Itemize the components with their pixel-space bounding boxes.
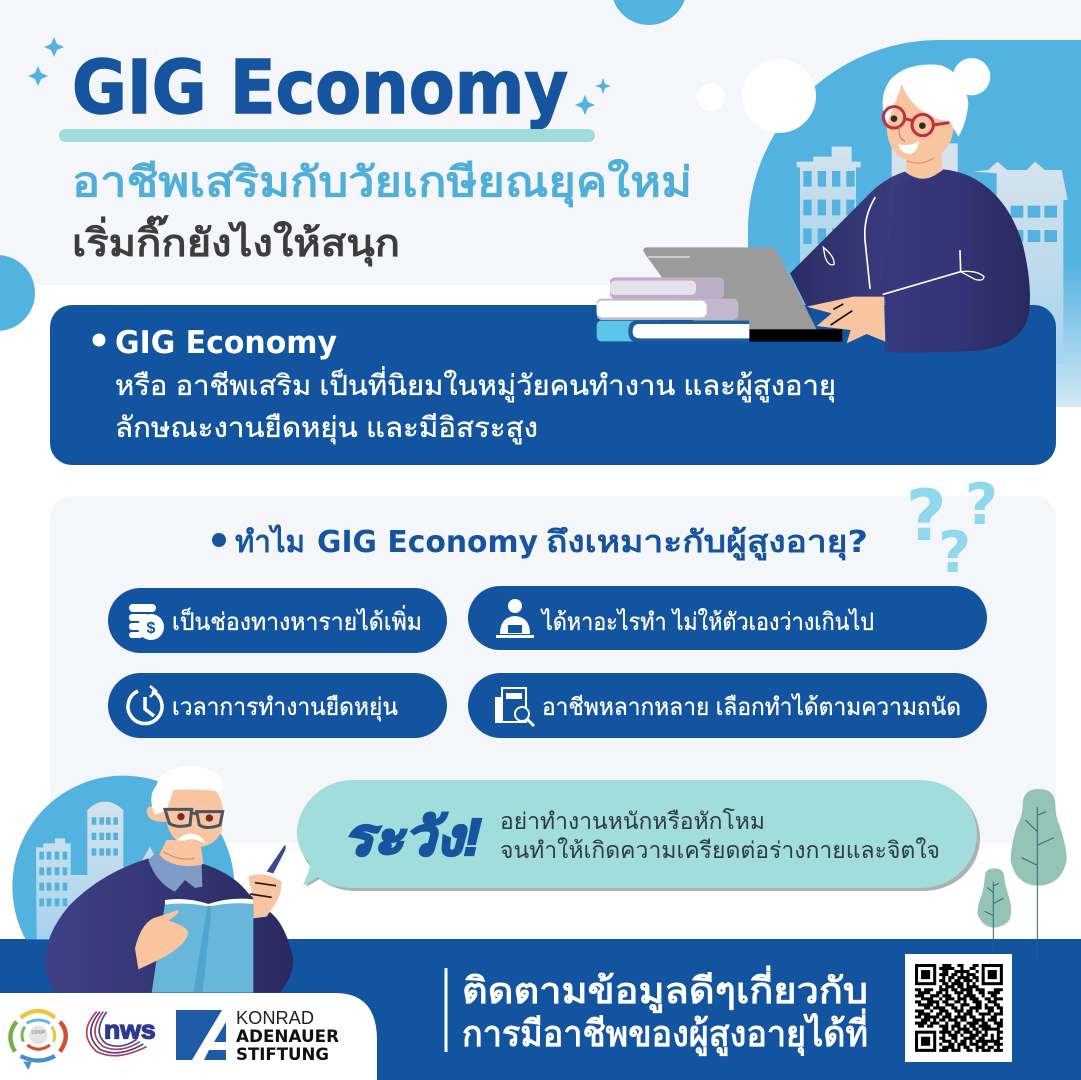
icon: trees — [977, 789, 1067, 960]
callout: warning speech bubble — [297, 780, 980, 891]
icon: question marks — [906, 472, 998, 586]
laptop — [643, 247, 842, 342]
sparkles — [28, 37, 611, 115]
panel body line 1: หรือ อาชีพเสริม เป็นที่นิยมในหมู่วัยคนทำงาน และผู้สูงอายุ — [115, 366, 836, 403]
illustration: background buildings behind woman — [797, 143, 1068, 363]
QR code — [905, 954, 1012, 1062]
warning text line 2: จนทำให้เกิดความเครียดต่อร่างกายและจิตใจ — [500, 837, 940, 863]
white bubble small — [697, 83, 725, 111]
icon: document with magnifier — [495, 688, 534, 726]
warning text line 1: อย่าทำงานหนักหรือหักโหม — [500, 808, 765, 834]
icon: coins: $ — [147, 620, 156, 637]
footer text line 2: การมีอาชีพของผู้สูงอายุได้ที่ — [462, 1008, 868, 1057]
footer band — [0, 939, 1081, 1080]
decorative circle left — [0, 255, 35, 331]
logo: nws — [87, 1012, 156, 1056]
icon: question marks: ? — [906, 475, 947, 557]
panel: why GIG economy suits older people — [50, 472, 1056, 843]
pill: extra income — [108, 588, 447, 653]
panel body line 2: ลักษณะงานยืดหยุ่น และมีอิสระสูง — [115, 412, 538, 445]
icon: coins — [129, 604, 164, 640]
section heading: ทำไม — [235, 524, 305, 560]
illustration: woman with laptop — [593, 58, 1030, 353]
panel heading: GIG Economy — [115, 325, 337, 361]
hand with pen — [248, 874, 282, 918]
illustration: man with book — [12, 766, 293, 998]
logo: Konrad Adenauer Stiftung: STIFTUNG — [236, 1045, 329, 1065]
icon: question marks: ? — [938, 520, 971, 586]
neck and head — [883, 58, 990, 179]
panel: GIG Economy definition — [50, 305, 1056, 465]
subtitle line 1: อาชีพเสริมกับวัยเกษียณยุคใหม่ — [72, 158, 692, 208]
neck and collar — [157, 840, 203, 873]
sweater — [790, 169, 1030, 352]
hair — [883, 64, 968, 137]
title: GIG Economy — [72, 45, 568, 131]
logo: Konrad Adenauer Stiftung — [176, 1008, 339, 1065]
pill: varied careers — [468, 673, 987, 738]
logo panel — [0, 993, 377, 1080]
logo: nws: nws — [104, 1014, 156, 1044]
section heading: GIG Economy — [317, 525, 538, 560]
pill text: อาชีพหลากหลาย เลือกทำได้ตามความถนัด — [542, 693, 961, 721]
section heading: ถึงเหมาะกับผู้สูงอายุ? — [546, 525, 868, 561]
pill text: เป็นช่องทางหารายได้เพิ่ม — [172, 605, 422, 636]
tree stems over footer — [993, 939, 1037, 960]
subtitle line 2: เริ่มกิ๊กยังไงให้สนุก — [72, 215, 400, 267]
hand — [807, 297, 885, 343]
logo: Konrad Adenauer Stiftung: KONRAD — [236, 1008, 314, 1028]
logo: COOP circle — [10, 1011, 66, 1070]
logo: COOP circle: COOP — [31, 1029, 45, 1034]
glasses — [165, 809, 223, 827]
pill text: เวลาการทำงานยืดหยุ่น — [172, 694, 398, 722]
book — [152, 900, 253, 993]
hand on book — [135, 910, 188, 969]
head — [147, 780, 223, 847]
pill text: ได้หาอะไรทำ ไม่ให้ตัวเองว่างเกินไป — [540, 608, 874, 636]
glasses — [883, 107, 949, 136]
pill: flexible hours — [108, 673, 447, 738]
warning word: ระวัง! — [343, 809, 482, 867]
footer divider — [444, 968, 448, 1052]
section heading — [235, 524, 868, 561]
circle and buildings — [12, 776, 234, 940]
woman background shape — [748, 40, 1081, 407]
footer text line 1: ติดตามข้อมูลดีๆเกี่ยวกับ — [462, 965, 868, 1014]
sweater — [45, 858, 293, 993]
icon: person at laptop — [496, 599, 534, 638]
icon: question marks: ? — [965, 472, 998, 538]
pill: something to do — [468, 586, 987, 650]
white bubble large — [742, 59, 816, 133]
decorative circle top — [611, 0, 687, 25]
title underline — [59, 129, 595, 142]
icon: clock — [128, 686, 162, 723]
logo: Konrad Adenauer Stiftung: ADENAUER — [236, 1027, 339, 1047]
books — [593, 277, 749, 342]
